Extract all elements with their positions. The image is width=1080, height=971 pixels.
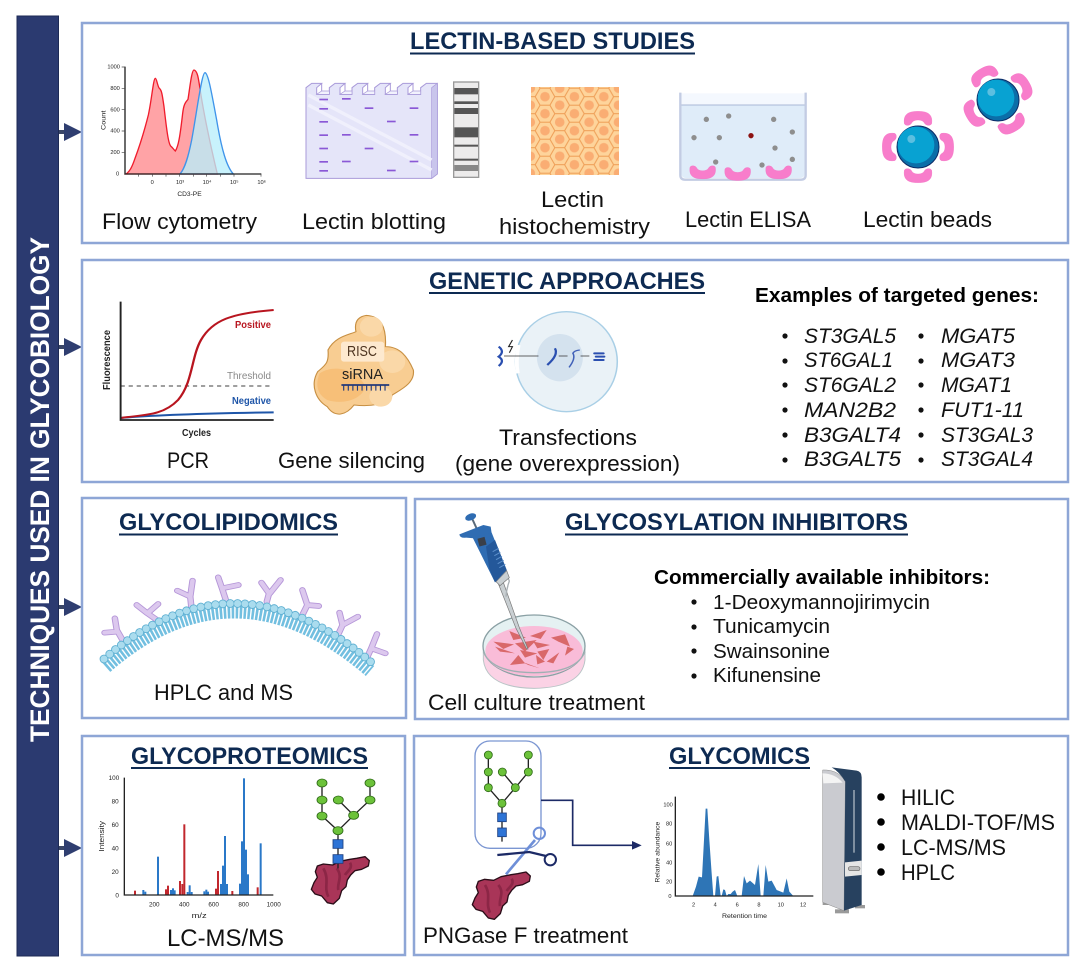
label: lectin beads: Lectin beads <box>863 207 992 232</box>
list: targeted genes left column: B3GALT4 <box>804 424 901 447</box>
chart: flow cytometry histogram: 10⁶ <box>257 179 266 186</box>
list: targeted genes left column: MAN2B2 <box>804 399 896 422</box>
list: targeted genes right column: ST3GAL4 <box>941 448 1033 471</box>
panel: glycoproteomics <box>82 736 405 955</box>
chart: flow cytometry histogram: 0 <box>151 180 154 186</box>
heading: glycoproteomics: GLYCOPROTEOMICS <box>131 743 368 770</box>
icon: lectin bead lower <box>882 111 954 183</box>
heading: glycomics: GLYCOMICS <box>669 743 810 770</box>
sidebar: techniques used in glycobiology <box>17 16 58 956</box>
chart: mass spectrum <box>97 775 281 920</box>
chart: mass spectrum: 400 <box>179 902 190 909</box>
chart: flow cytometry histogram: 0 <box>116 172 119 178</box>
list: targeted genes left column: ST3GAL5 <box>804 325 896 348</box>
chart: flow cytometry histogram <box>100 65 266 198</box>
icon: gel lane strip <box>454 82 479 177</box>
icon: lectin blot gel <box>306 83 437 178</box>
chart: PCR amplification curve <box>101 302 274 439</box>
label: transfections <box>455 425 680 476</box>
label: flow cytometry: Flow cytometry <box>102 209 257 234</box>
icon: deglycosylated protein <box>472 872 530 919</box>
list: targeted genes right column <box>918 325 1033 471</box>
chart: chromatogram: 80 <box>666 821 672 827</box>
chart: mass spectrum: 60 <box>112 822 119 829</box>
chart: PCR amplification curve: Fluorescence <box>101 330 113 390</box>
chart: mass spectrum: 40 <box>112 846 119 853</box>
icon: glycoprotein <box>311 779 375 904</box>
chart: mass spectrum: 0 <box>115 892 119 899</box>
list: glycomics methods: MALDI-TOF/MS <box>901 810 1055 835</box>
chart: chromatogram: 4 <box>714 903 717 909</box>
text: examples of targeted genes: Examples of targeted genes: <box>755 285 1039 307</box>
label: gene silencing: Gene silencing <box>278 448 425 473</box>
chart: flow cytometry histogram: CD3-PE <box>177 191 202 198</box>
list: targeted genes left column: ST6GAL2 <box>804 374 896 397</box>
chart: chromatogram: 6 <box>736 903 739 909</box>
list: inhibitors: Tunicamycin <box>713 615 830 638</box>
chart: flow cytometry histogram: 10⁴ <box>203 179 212 186</box>
icon: petri dish with cells <box>483 615 585 688</box>
chart: mass spectrum: 1000 <box>267 902 281 909</box>
chart: chromatogram: Retention time <box>722 913 767 920</box>
chart: flow cytometry histogram: 800 <box>110 86 120 92</box>
chart: PCR amplification curve: Positive <box>235 319 271 331</box>
chart: chromatogram: 40 <box>666 860 672 866</box>
chart: flow cytometry histogram: 200 <box>110 150 120 156</box>
chart: flow cytometry histogram: Count <box>100 111 107 130</box>
list: targeted genes right column: MGAT5 <box>941 325 1015 348</box>
chart: mass spectrum: m/z <box>192 911 207 920</box>
chart: PCR amplification curve: Threshold <box>227 370 271 382</box>
list: targeted genes right column: MGAT3 <box>941 349 1015 372</box>
label: PNGase F treatment: PNGase F treatment <box>423 923 628 948</box>
sidebar: techniques used in glycobiology: TECHNIQUES USED IN GLYCOBIOLOGY <box>25 237 55 742</box>
icon: lectin ELISA well <box>680 93 806 181</box>
icon: RISC complex with siRNA <box>314 315 414 414</box>
panel: genetic approaches <box>82 260 1068 482</box>
chart: mass spectrum: 20 <box>112 869 119 876</box>
list: glycomics methods: HPLC <box>901 860 955 885</box>
chart: chromatogram: 60 <box>666 842 672 848</box>
chart: chromatogram <box>655 797 813 920</box>
label: lectin histochemistry <box>499 187 650 239</box>
icon: transfected cell <box>499 312 617 412</box>
chart: flow cytometry histogram: 10³ <box>176 180 184 186</box>
panel: lectin-based studies <box>82 23 1068 243</box>
arrow: to genetic approaches <box>50 338 82 356</box>
icon: RISC complex with siRNA: siRNA <box>342 366 383 383</box>
chart: flow cytometry histogram: 10⁵ <box>230 179 239 186</box>
chart: chromatogram: 100 <box>663 802 673 808</box>
chart: flow cytometry histogram: 600 <box>110 107 120 113</box>
label: HPLC and MS: HPLC and MS <box>154 680 293 705</box>
heading: glycosylation inhibitors: GLYCOSYLATION INHIBITORS <box>565 509 908 536</box>
chart: mass spectrum: 600 <box>208 902 219 909</box>
list: inhibitors <box>691 591 930 687</box>
chart: mass spectrum: 100 <box>109 775 120 782</box>
icon: scissors <box>497 828 556 874</box>
chart: chromatogram: Relative abundance <box>655 821 662 883</box>
chart: chromatogram: 8 <box>757 903 760 909</box>
chart: mass spectrum: Intensity <box>97 821 106 852</box>
list: glycomics methods: HILIC <box>901 785 955 810</box>
label: LC-MS/MS: LC-MS/MS <box>167 925 284 952</box>
label: lectin ELISA: Lectin ELISA <box>685 207 811 232</box>
heading: genetic approaches: GENETIC APPROACHES <box>429 268 705 295</box>
list: targeted genes left column: B3GALT5 <box>804 448 901 471</box>
chart: chromatogram: 20 <box>666 879 672 885</box>
icon: mass spectrometer instrument <box>823 767 865 913</box>
chart: flow cytometry histogram: 400 <box>110 129 120 135</box>
list: targeted genes left column <box>782 325 901 471</box>
chart: chromatogram: 12 <box>800 903 806 909</box>
chart: flow cytometry histogram: 1000 <box>107 65 120 71</box>
label: transfections: Transfections <box>499 425 637 450</box>
list: glycomics methods <box>877 785 1055 885</box>
heading: lectin-based studies: LECTIN-BASED STUDIES <box>410 28 695 55</box>
panel: glycomics <box>414 736 1068 955</box>
list: targeted genes right column: FUT1-11 <box>941 399 1024 422</box>
list: targeted genes right column: MGAT1 <box>941 374 1012 397</box>
list: glycomics methods: LC-MS/MS <box>901 835 1006 860</box>
icon: pipette <box>459 512 528 649</box>
icon: lectin bead upper <box>949 51 1047 149</box>
text: commercially available inhibitors: Commercially available inhibitors: <box>654 567 990 589</box>
list: inhibitors: 1-Deoxymannojirimycin <box>713 591 930 614</box>
panel: glycosylation inhibitors <box>415 499 1068 719</box>
label: cell culture treatment: Cell culture treatment <box>428 690 645 715</box>
label: transfections: (gene overexpression) <box>455 451 680 476</box>
icon: RISC complex with siRNA: RISC <box>347 343 377 360</box>
heading: glycolipidomics: GLYCOLIPIDOMICS <box>119 509 338 536</box>
arrow: to glycolipidomics <box>50 598 82 616</box>
panel: glycolipidomics <box>82 498 406 718</box>
chart: mass spectrum: 800 <box>238 902 249 909</box>
chart: PCR amplification curve: Negative <box>232 395 271 407</box>
icon: released glycan in rounded box <box>475 741 541 848</box>
icon: lipid bilayer with glycans <box>104 577 385 671</box>
arrow: glycan to chromatogram <box>541 800 642 850</box>
icon: tissue section histochemistry <box>531 87 619 175</box>
chart: chromatogram: 10 <box>778 903 784 909</box>
chart: chromatogram: 0 <box>668 894 671 900</box>
chart: PCR amplification curve: Cycles <box>182 427 211 439</box>
chart: chromatogram: 2 <box>692 903 695 909</box>
chart: mass spectrum: 200 <box>149 902 160 909</box>
list: targeted genes right column: ST3GAL3 <box>941 424 1033 447</box>
arrow: to glycoproteomics <box>50 839 82 857</box>
list: inhibitors: Kifunensine <box>713 664 821 687</box>
list: targeted genes left column: ST6GAL1 <box>804 349 893 372</box>
label: lectin histochemistry: Lectin <box>541 187 604 212</box>
label: lectin blotting: Lectin blotting <box>302 209 446 234</box>
label: PCR: PCR <box>167 448 209 473</box>
label: lectin histochemistry: histochemistry <box>499 214 650 239</box>
arrow: to lectin-based studies <box>50 123 82 141</box>
list: inhibitors: Swainsonine <box>713 640 830 663</box>
chart: mass spectrum: 80 <box>112 799 119 806</box>
